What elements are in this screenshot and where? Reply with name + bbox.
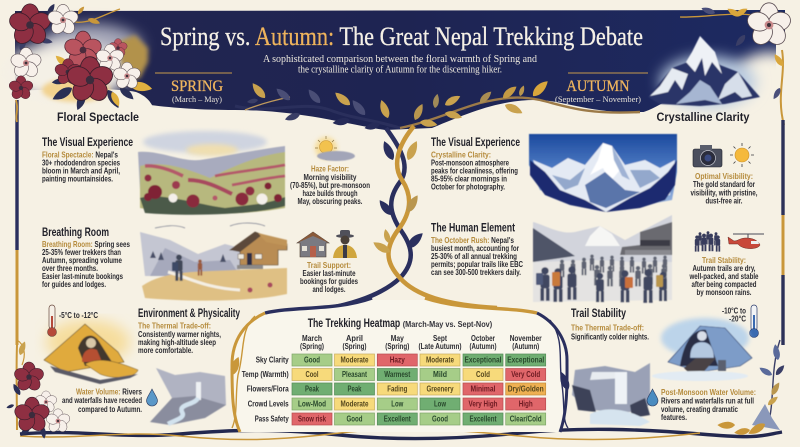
trail support text: and lodges. bbox=[312, 285, 346, 294]
haze factor text bbox=[290, 164, 370, 206]
haze factor icon bbox=[315, 136, 355, 161]
breathing room spring text: over three months. bbox=[42, 264, 98, 273]
breathing room spring text: 25-35% fewer trekkers than bbox=[42, 248, 121, 257]
visual experience autumn text: October for photography. bbox=[431, 182, 505, 192]
trail stability text: Trail Stability: bbox=[702, 256, 746, 265]
heatmap row labels bbox=[242, 356, 289, 424]
heatmap row labels: Flowers/Flora bbox=[247, 384, 289, 394]
human element text: can see 300-500 trekkers daily. bbox=[431, 268, 521, 277]
row: flowers: Peak bbox=[305, 385, 319, 394]
heatmap column headers: (Spring) bbox=[300, 342, 324, 351]
row: flowers: Peak bbox=[348, 385, 362, 394]
row: temperature: Warmest bbox=[384, 370, 411, 379]
trail support text: Easier last-minute bbox=[302, 269, 356, 278]
row: sky clarity: Hazy bbox=[390, 356, 405, 365]
human element text: The Human Element bbox=[431, 223, 515, 235]
breathing room spring text: Breathing Room bbox=[42, 227, 109, 239]
environment and physicality text: Consistently warmer nights, bbox=[138, 330, 221, 339]
water volume spring text bbox=[62, 388, 142, 414]
title: Spring vs. Autumn: The Great Nepal Trekking Debate bbox=[160, 22, 643, 51]
row: crowds: Low-Mod bbox=[298, 400, 326, 409]
braided central tree bbox=[330, 126, 497, 308]
row: crowds: Moderate bbox=[340, 400, 369, 409]
trail stability autumn text: Trail Stability bbox=[571, 308, 626, 320]
heatmap column headers: (Autumn) bbox=[470, 342, 497, 351]
heatmap column headers: (Spring) bbox=[342, 342, 367, 351]
trail support icons bbox=[297, 230, 357, 258]
environment and physicality text bbox=[138, 308, 240, 355]
row: sky clarity: Moderate bbox=[340, 356, 369, 365]
heatmap row labels: Crowd Levels bbox=[248, 400, 289, 408]
breathing room spring text: for guides and lodges. bbox=[42, 280, 106, 289]
water volume spring text: Water Volume: Rivers bbox=[76, 388, 142, 396]
breathing room spring text bbox=[42, 227, 130, 289]
heatmap column headers bbox=[300, 334, 542, 351]
heatmap column headers: May bbox=[391, 334, 404, 343]
row: temperature: Very Cold bbox=[511, 370, 540, 379]
human element text: busiest month, accounting for bbox=[431, 244, 520, 253]
waterfall illustration bbox=[572, 363, 650, 426]
trail stability autumn text: Significantly colder nights. bbox=[571, 332, 649, 342]
rhododendron hills illustration bbox=[138, 131, 285, 215]
row: temperature: Mild bbox=[433, 370, 447, 379]
row: flowers bbox=[292, 383, 546, 395]
breathing room spring text: Easier last-minute bookings bbox=[42, 272, 123, 281]
row: temperature: Cold bbox=[476, 370, 490, 379]
optimal visibility text: The gold standard for bbox=[693, 180, 756, 189]
haze factor text: Haze Factor: bbox=[311, 164, 349, 174]
heatmap frame bbox=[228, 298, 571, 432]
blue tent illustration bbox=[652, 318, 752, 381]
heatmap column headers: (Late Autumn) bbox=[418, 342, 462, 351]
left corner flowers bbox=[7, 3, 120, 101]
environment and physicality text: The Thermal Trade-off: bbox=[138, 322, 211, 330]
thermometer cold bbox=[750, 305, 758, 338]
visual experience autumn text: peaks for cleanliness, offering bbox=[431, 166, 518, 176]
warm temperature label: -5°C to -12°C bbox=[59, 311, 98, 320]
row: sky clarity bbox=[292, 354, 546, 366]
heatmap column headers: Sept bbox=[433, 334, 447, 343]
visual experience autumn text: 85-95% clear mornings in bbox=[431, 174, 507, 184]
heatmap column headers: October bbox=[471, 334, 496, 343]
row: pass safety: Good bbox=[346, 415, 363, 424]
row: sky clarity: Good bbox=[304, 356, 320, 365]
row: flowers: Fading bbox=[387, 385, 407, 394]
spring label bbox=[155, 73, 232, 104]
human element text: 25-30% of all annual trekking bbox=[431, 252, 517, 261]
heatmap title: The Trekking Heatmap bbox=[308, 318, 400, 330]
water volume spring text: compared to Autumn. bbox=[78, 405, 142, 414]
trail support text bbox=[300, 261, 358, 294]
breathing room spring text: Autumn, spreading volume bbox=[42, 256, 122, 265]
autumn label bbox=[555, 73, 648, 104]
environment and physicality text: making high-altitude sleep bbox=[138, 338, 216, 347]
row: crowds: Very High bbox=[468, 400, 498, 409]
human element text bbox=[431, 223, 523, 277]
row: flowers: Greenery bbox=[426, 385, 454, 394]
row: crowds: Low bbox=[391, 400, 404, 409]
haze factor text: May, obscuring peaks. bbox=[298, 197, 362, 206]
trail support text: bookings for guides bbox=[300, 277, 358, 286]
row: pass safety bbox=[292, 413, 546, 425]
heatmap title: (March-May vs. Sept-Nov) bbox=[403, 319, 492, 329]
water drop autumn bbox=[647, 389, 658, 406]
row: pass safety: Excellent bbox=[470, 415, 497, 424]
camera and sun icons bbox=[693, 143, 754, 167]
row: flowers: Dry/Golden bbox=[508, 385, 544, 394]
lower right leaves bbox=[717, 340, 786, 437]
visual experience spring text: The Visual Experience bbox=[42, 137, 133, 149]
trail stability text bbox=[689, 256, 759, 297]
post-monsoon water text: features. bbox=[661, 413, 687, 422]
autumn label: AUTUMN bbox=[566, 78, 630, 95]
summit illustration bbox=[648, 36, 760, 106]
environment and physicality text: Environment & Physicality bbox=[138, 308, 240, 320]
haze factor text: Morning visibility bbox=[304, 173, 357, 182]
row: pass safety: Clear/Cold bbox=[510, 415, 542, 424]
heatmap column headers: March bbox=[302, 334, 322, 343]
header banner bbox=[0, 10, 800, 130]
spring label: SPRING bbox=[171, 78, 223, 95]
post-monsoon water text: volume, creating dramatic bbox=[661, 405, 738, 414]
visual experience autumn text: The Visual Experience bbox=[431, 137, 520, 149]
post-monsoon water text: Post-Monsoon Water Volume: bbox=[661, 388, 756, 397]
subtitle: the crystalline clarity of Autumn for the discerning hiker. bbox=[298, 64, 502, 76]
heatmap column headers: November bbox=[510, 334, 542, 343]
visual experience spring text bbox=[42, 137, 133, 184]
human element text: permits; popular trails like EBC bbox=[431, 260, 523, 269]
visual experience spring text: 30+ rhododendron species bbox=[42, 158, 120, 168]
cold temperature label bbox=[722, 306, 746, 324]
row: temperature bbox=[292, 368, 546, 380]
visual experience autumn text: Crystalline Clarity: bbox=[431, 150, 491, 160]
post-monsoon water text: Rivers and waterfalls run at full bbox=[661, 396, 754, 406]
row: temperature: Pleasant bbox=[342, 370, 367, 379]
crowd and helicopter icons bbox=[695, 231, 764, 252]
row: crowds: High bbox=[519, 400, 533, 409]
crowded trail illustration bbox=[533, 215, 672, 303]
optimal visibility text bbox=[690, 172, 758, 206]
row: flowers: Minimal bbox=[470, 385, 496, 394]
visual experience autumn text: Post-monsoon atmosphere bbox=[431, 158, 509, 168]
heatmap row labels: Sky Clarity bbox=[256, 356, 289, 364]
cold temperature label: -20°C bbox=[729, 314, 746, 324]
haze factor text: (70-85%), but pre-monsoon bbox=[290, 181, 370, 190]
trail stability text: well-packed, and stable bbox=[689, 272, 759, 281]
visual experience spring text: bloom in March and April, bbox=[42, 166, 120, 176]
trail stability autumn text: The Thermal Trade-off: bbox=[571, 324, 644, 332]
visual experience autumn text bbox=[431, 137, 520, 192]
visual experience spring text: Floral Spectacle: Nepal's bbox=[42, 150, 118, 160]
crystalline clarity label: Crystalline Clarity bbox=[656, 110, 750, 124]
row: crowds: Low bbox=[434, 400, 447, 409]
trail stability autumn text bbox=[571, 308, 649, 342]
heatmap row labels: Pass Safety bbox=[255, 414, 289, 424]
row: sky clarity: Exceptional bbox=[507, 356, 544, 365]
heatmap title bbox=[308, 318, 492, 330]
trail stability text: Autumn trails are dry, bbox=[692, 264, 756, 273]
lodge and hikers illustration bbox=[140, 223, 287, 301]
row: pass safety: Snow risk bbox=[298, 415, 326, 424]
human element text: The October Rush: Nepal's bbox=[431, 236, 514, 245]
haze factor text: haze builds through bbox=[302, 189, 358, 198]
row: temperature: Cool bbox=[306, 370, 318, 379]
thermometer warm bbox=[48, 305, 56, 336]
row: pass safety: Excellent bbox=[384, 415, 411, 424]
heatmap cells bbox=[292, 354, 546, 425]
heatmap column headers: (Spring) bbox=[385, 342, 410, 351]
visual experience spring text: painting mountainsides. bbox=[42, 174, 113, 184]
subtitle: A sophisticated comparison between the floral warmth of Spring and bbox=[263, 54, 538, 65]
row: sky clarity: Moderate bbox=[426, 356, 454, 365]
row: pass safety: Good bbox=[432, 415, 448, 424]
water volume spring text: and waterfalls have receded bbox=[62, 396, 142, 405]
post-monsoon water text bbox=[661, 388, 756, 422]
optimal visibility text: visibility, with pristine, bbox=[690, 188, 758, 198]
cold temperature label: -10°C to bbox=[722, 306, 746, 316]
water drop spring bbox=[146, 389, 158, 406]
autumn label: (September – November) bbox=[555, 95, 641, 104]
trail support text: Trail Support: bbox=[307, 261, 351, 270]
banner vine left bbox=[235, 81, 400, 131]
trail stability text: after being compacted bbox=[692, 280, 756, 289]
floral spectacle label: Floral Spectacle bbox=[57, 110, 139, 124]
subtitle bbox=[263, 54, 538, 76]
optimal visibility text: Optimal Visibility: bbox=[695, 172, 753, 181]
row: crowds bbox=[292, 398, 546, 410]
trail stability text: by monsoon rains. bbox=[696, 288, 752, 297]
heatmap row labels: Temp (Warmth) bbox=[242, 370, 289, 379]
yellow tent illustration bbox=[44, 320, 138, 384]
right corner flower and vine bbox=[680, 3, 793, 48]
banner vine right bbox=[400, 78, 640, 128]
spring bouquet bbox=[51, 31, 153, 111]
spring label: (March – May) bbox=[172, 95, 222, 104]
small river illustration bbox=[150, 368, 226, 425]
heatmap column headers: (Autumn) bbox=[512, 342, 539, 351]
himalayan peaks illustration bbox=[529, 134, 677, 212]
heatmap column headers: April bbox=[346, 334, 363, 343]
lower left flowers bbox=[6, 340, 71, 439]
row: sky clarity: Exceptional bbox=[464, 356, 502, 365]
optimal visibility text: dust-free air. bbox=[706, 196, 742, 206]
breathing room spring text: Breathing Room: Spring sees bbox=[42, 240, 130, 249]
environment and physicality text: more comfortable. bbox=[138, 346, 193, 355]
